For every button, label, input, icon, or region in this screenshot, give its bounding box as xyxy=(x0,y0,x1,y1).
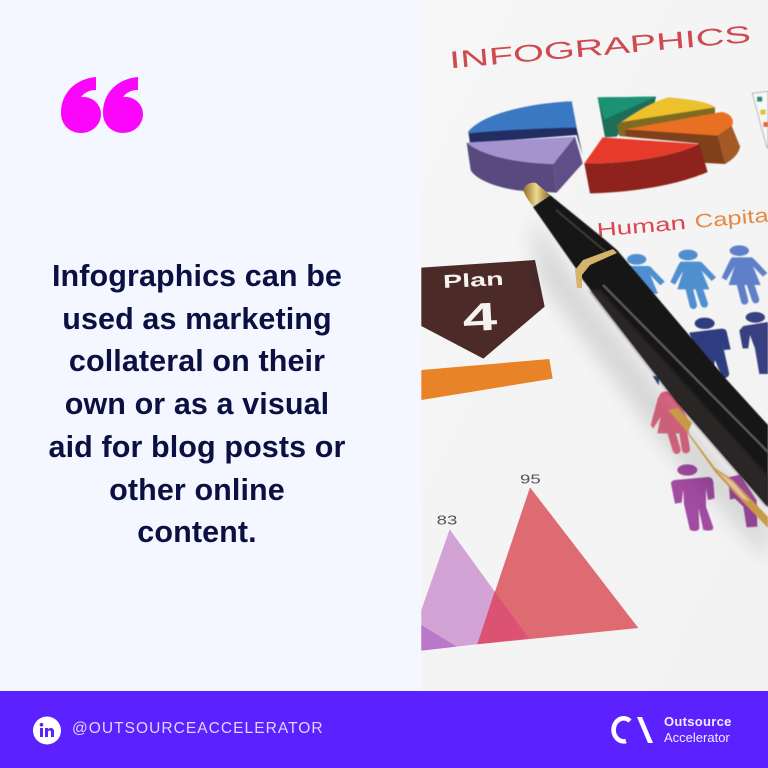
icon: linkedin xyxy=(33,716,61,744)
human capital heading: Capita xyxy=(694,206,768,233)
triangle chart: 95 xyxy=(520,472,541,486)
brand name: Accelerator xyxy=(664,730,730,744)
person: blue female xyxy=(670,250,716,305)
pen tip xyxy=(523,183,550,206)
main text block: own or as a visual xyxy=(65,387,329,421)
plan 4 badge: Plan xyxy=(442,268,504,292)
3D pie chart xyxy=(467,91,768,193)
pen body xyxy=(533,195,768,507)
orange bar xyxy=(421,359,553,400)
person: pink female head xyxy=(659,391,673,402)
pen xyxy=(523,183,768,560)
human capital heading xyxy=(596,206,768,242)
plan 4 badge xyxy=(421,260,553,400)
main text block: collateral on their xyxy=(69,344,325,378)
main text block xyxy=(49,259,345,549)
brand name: Outsource xyxy=(664,714,732,729)
infographics title: INFOGRAPHICS xyxy=(448,21,752,74)
pen clip xyxy=(668,408,768,528)
person: indigo male xyxy=(739,312,768,374)
person: pink female xyxy=(651,397,689,450)
person: periwinkle female xyxy=(722,245,767,301)
footer bar xyxy=(0,691,768,768)
brand name xyxy=(664,714,732,744)
triangle chart xyxy=(421,472,638,651)
pie legend xyxy=(752,91,768,148)
person: blue female, partly under pen xyxy=(619,254,665,294)
main text block: other online xyxy=(109,473,285,507)
person: purple male xyxy=(671,464,757,531)
people pictograms xyxy=(619,245,768,402)
pen ring xyxy=(575,249,617,288)
human capital heading: Human xyxy=(596,213,687,242)
quote mark icon xyxy=(61,77,143,133)
main text block: content. xyxy=(137,515,257,549)
logo mark xyxy=(611,716,653,744)
main text block: aid for blog posts or xyxy=(49,430,345,464)
plan 4 badge: 4 xyxy=(461,295,498,340)
main text block: Infographics can be xyxy=(52,259,342,293)
triangle chart: 83 xyxy=(437,514,457,528)
main text block: used as marketing xyxy=(62,302,332,336)
person: navy male xyxy=(689,318,731,379)
social handle: @OUTSOURCEACCELERATOR xyxy=(72,720,324,737)
